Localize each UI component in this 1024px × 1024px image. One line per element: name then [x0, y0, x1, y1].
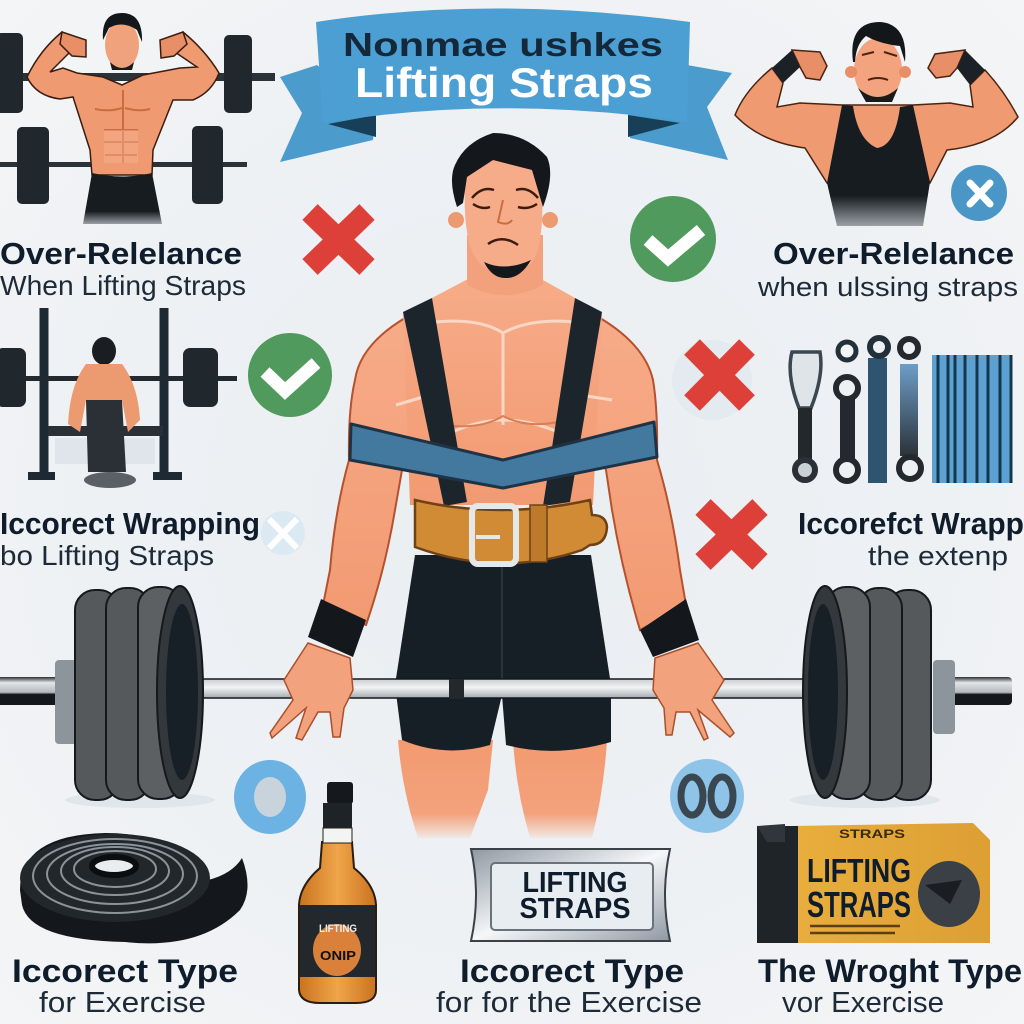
right arm [580, 318, 686, 630]
shoulder straps [403, 298, 467, 506]
barbell [0, 586, 1012, 808]
left arm [322, 318, 425, 625]
product: foil packet: LIFTING [522, 867, 628, 899]
product: yellow box: STRAPS [807, 884, 911, 925]
label: incorrect wrap right [798, 506, 1024, 571]
shadows [65, 792, 215, 808]
label: over-reliance left: When Lifting Straps [0, 270, 246, 301]
icon: green check top [630, 196, 716, 282]
central figure [322, 133, 686, 838]
product: bottle [299, 782, 376, 1003]
label: incorrect type center [436, 953, 702, 1019]
arms and torso [735, 68, 1018, 183]
right plates [803, 586, 955, 800]
icon: blue circle strap loop left [234, 760, 306, 834]
right fist [160, 32, 187, 58]
label: over-reliance right: Over-Relelance [773, 236, 1014, 271]
squat rack panel [0, 308, 237, 488]
legs [398, 740, 493, 838]
label: incorrect wrapping left: Iccorect Wrapping [0, 506, 260, 541]
title line 2: Lifting Straps [355, 59, 653, 106]
label: incorrect type left [12, 953, 238, 1019]
product: yellow box [757, 823, 990, 943]
left fist [792, 50, 827, 80]
shorts [395, 555, 611, 751]
icon: red cross right upper [672, 340, 752, 420]
label: wrong type right: The Wroght Type [758, 953, 1022, 989]
icon: blue circle figure-eight right [670, 759, 744, 833]
muscular figure [27, 32, 219, 175]
chest muscle lines [396, 321, 612, 432]
label: incorrect type left: for Exercise [39, 987, 206, 1019]
bottle label text: LIFTING [319, 923, 357, 935]
label: incorrect wrapping left: bo Lifting Straps [0, 540, 214, 571]
title line 1: Nonmae ushkes [343, 26, 663, 63]
label: over-reliance left: Over-Relelance [0, 236, 242, 271]
icon: red cross top left [310, 212, 367, 267]
label: incorrect wrapping left [0, 506, 260, 571]
strap set panel [790, 338, 1012, 483]
icon: red cross right lower [703, 507, 760, 562]
label: incorrect type center: for for the Exercise [436, 987, 702, 1019]
label: over-reliance right [757, 236, 1018, 302]
head [448, 212, 464, 228]
label: wrong type right [758, 953, 1022, 1019]
chest wrap strap [350, 422, 657, 488]
title banner [280, 8, 732, 162]
head [105, 21, 139, 69]
barbell lower [0, 126, 247, 204]
hair [452, 133, 550, 207]
tank top [827, 105, 930, 226]
top left lifter panel [0, 13, 275, 224]
torso [403, 280, 602, 505]
right hand [653, 643, 734, 740]
beard [484, 260, 531, 278]
icon: white cross left [261, 511, 305, 555]
icon: green check left [248, 333, 332, 417]
belt buckle [472, 506, 516, 564]
wrist bands [772, 50, 800, 83]
eyes and mouth [472, 189, 538, 245]
label: incorrect wrap right: the extenp [868, 541, 1008, 571]
bar end right [950, 677, 1012, 705]
product: yellow box: LIFTING [807, 852, 911, 889]
icon: blue cross top right [951, 165, 1007, 221]
shorts [83, 173, 162, 224]
top right lifter panel [735, 22, 1018, 226]
label: over-reliance left [0, 236, 246, 301]
label: incorrect type left: Iccorect Type [12, 953, 238, 989]
left plates [55, 586, 203, 800]
right fist [928, 50, 965, 78]
label: incorrect type center: Iccorect Type [460, 953, 684, 989]
label: wrong type right: vor Exercise [782, 987, 944, 1019]
right wrist band [640, 599, 699, 657]
head [854, 38, 902, 102]
leather belt [415, 500, 607, 563]
label: over-reliance right: when ulssing straps [757, 272, 1018, 302]
neck [467, 235, 543, 295]
left hand [270, 643, 353, 740]
product: bottle: ONIP [320, 948, 356, 963]
product: foil packet: STRAPS [520, 893, 630, 925]
left fist [60, 32, 86, 57]
product: rolled strap [20, 833, 248, 943]
bar end left [0, 677, 60, 705]
product: yellow box: STRAPS [839, 827, 905, 841]
product: foil packet [471, 849, 670, 941]
bar [190, 679, 817, 698]
barbell upper [0, 33, 275, 113]
left wrist band [308, 599, 366, 657]
